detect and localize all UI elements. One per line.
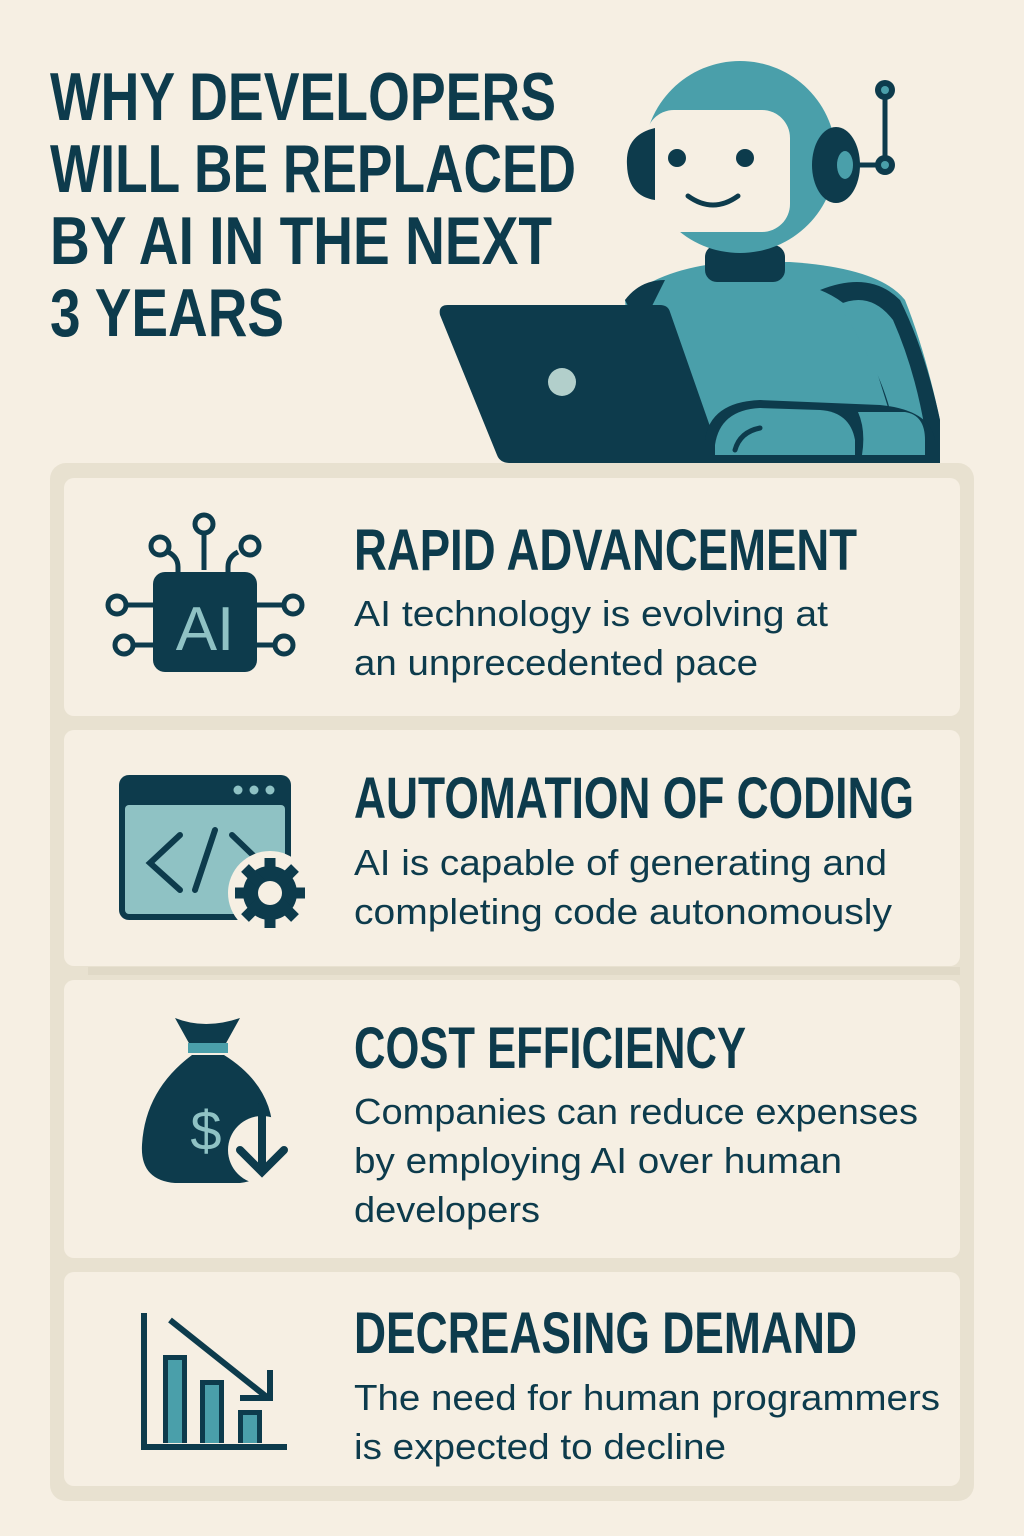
body text: The need for human programmers — [354, 1377, 940, 1418]
card: automation of coding — [64, 730, 960, 966]
card: rapid advancement — [64, 478, 960, 716]
body text: an unprecedented pace — [354, 642, 758, 683]
card: decreasing demand — [64, 1272, 960, 1486]
card: cost efficiency — [64, 980, 960, 1258]
antenna — [858, 90, 885, 165]
laptop — [440, 305, 790, 463]
robot illustration — [440, 61, 940, 463]
body text — [354, 842, 892, 932]
body text — [354, 1377, 940, 1467]
neck — [705, 245, 785, 282]
body text: completing code autonomously — [354, 891, 892, 932]
icon: money bag with down arrow: $ — [190, 1099, 222, 1162]
body text: AI technology is evolving at — [354, 593, 828, 634]
title: WILL BE REPLACED — [50, 131, 576, 207]
body text — [354, 593, 828, 683]
icon: code window with gear — [119, 775, 312, 935]
heading: RAPID ADVANCEMENT — [354, 518, 857, 583]
heading: COST EFFICIENCY — [354, 1016, 746, 1081]
body text — [354, 1091, 918, 1230]
hand — [705, 400, 935, 463]
title — [50, 59, 576, 351]
outer panel — [50, 463, 974, 1501]
body text: by employing AI over human — [354, 1140, 842, 1181]
body — [625, 262, 940, 463]
icon: AI chip — [108, 515, 302, 654]
card: rapid advancement: AI — [176, 595, 234, 664]
ears — [627, 128, 655, 200]
title: BY AI IN THE NEXT — [50, 203, 552, 279]
heading: DECREASING DEMAND — [354, 1301, 857, 1366]
body text: AI is capable of generating and — [354, 842, 887, 883]
title: WHY DEVELOPERS — [50, 59, 556, 135]
icon: money bag with down arrow — [142, 1018, 296, 1184]
body text: developers — [354, 1189, 540, 1230]
body text: Companies can reduce expenses — [354, 1091, 918, 1132]
helmet — [644, 61, 836, 253]
body text: is expected to decline — [354, 1426, 726, 1467]
title: 3 YEARS — [50, 275, 284, 351]
icon: declining bar chart — [144, 1313, 287, 1447]
